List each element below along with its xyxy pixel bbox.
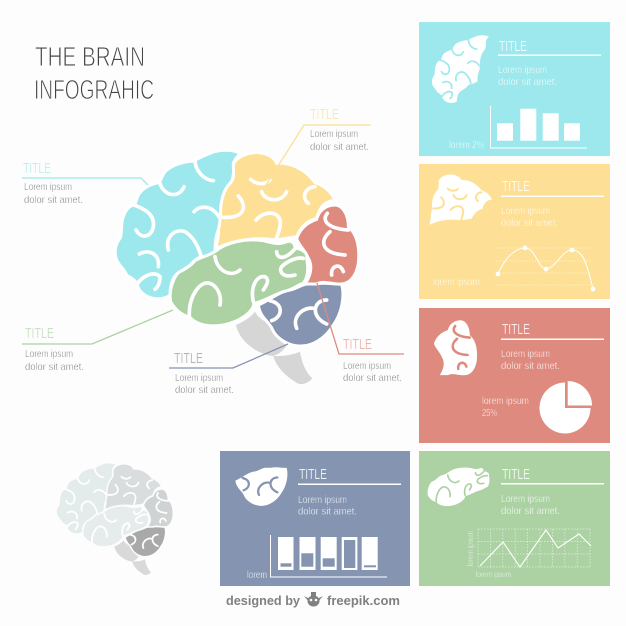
panel: yellow line chart: dolor sit amet. xyxy=(501,217,558,229)
callout: blue lobe xyxy=(169,344,288,396)
grid line chart xyxy=(478,529,591,567)
panel: green grid line chart: lorem ipsum xyxy=(466,531,475,566)
panel: cyan bar chart: Lorem ipsum xyxy=(498,64,547,76)
callout: yellow lobe: TITLE xyxy=(310,106,339,123)
callout: red lobe xyxy=(317,283,404,384)
callout: yellow lobe: Lorem ipsum xyxy=(310,128,358,140)
callout: blue lobe: Lorem ipsum xyxy=(175,372,223,384)
panel: red pie chart: TITLE xyxy=(502,321,530,338)
callout: green lobe xyxy=(22,310,173,373)
panel: red pie chart: dolor sit amet. xyxy=(501,360,560,372)
panel: blue bars xyxy=(220,451,410,586)
pie chart xyxy=(540,381,592,434)
panel: yellow line chart: TITLE xyxy=(502,178,530,195)
title: THE BRAIN xyxy=(35,41,145,72)
callout: green lobe: TITLE xyxy=(25,325,54,342)
callout: yellow lobe xyxy=(266,106,371,185)
callout: blue lobe: dolor sit amet. xyxy=(175,384,234,396)
callout: green lobe: Lorem ipsum xyxy=(25,348,73,360)
panel: red pie chart: 25% xyxy=(482,407,497,419)
panel: blue bars: TITLE xyxy=(299,466,327,483)
callout: red lobe: Lorem ipsum xyxy=(343,360,391,372)
title xyxy=(34,41,154,105)
callout: cyan lobe: dolor sit amet. xyxy=(24,194,83,206)
panel: green grid line chart: Lorem ipsum xyxy=(501,493,550,505)
icon: freepik logo xyxy=(304,592,323,606)
panel: yellow line chart xyxy=(419,164,610,299)
bar gauges xyxy=(270,535,387,577)
footer credit xyxy=(226,592,400,608)
panel: green grid line chart: lorem ipsum xyxy=(476,570,511,579)
callout: yellow lobe: dolor sit amet. xyxy=(310,141,369,153)
panel: green grid line chart xyxy=(419,451,610,586)
panel: cyan bar chart xyxy=(419,22,610,156)
panel: blue bars: dolor sit amet. xyxy=(298,506,357,518)
callout: cyan lobe: TITLE xyxy=(23,160,51,177)
panel: green grid line chart: dolor sit amet. xyxy=(501,505,560,517)
panel: red pie chart xyxy=(419,308,610,443)
bar chart xyxy=(490,106,587,148)
main brain illustration xyxy=(115,150,359,384)
title: INFOGRAHIC xyxy=(34,74,154,105)
panel: cyan bar chart: TITLE xyxy=(499,38,527,55)
callout: blue lobe: TITLE xyxy=(174,350,203,367)
callout: green lobe: dolor sit amet. xyxy=(25,361,84,373)
callout: red lobe: TITLE xyxy=(343,336,372,353)
panel: blue bars: Lorem ipsum xyxy=(298,494,347,506)
panel: red pie chart: Lorem ipsum xyxy=(501,348,550,360)
panel: cyan bar chart: lorem 2% xyxy=(449,140,484,151)
footer credit: freepik.com xyxy=(327,593,400,608)
callout: cyan lobe xyxy=(22,160,148,206)
panel: red pie chart: lorem ipsum xyxy=(482,395,529,407)
panel: yellow line chart: Lorem ipsum xyxy=(501,205,550,217)
footer credit: designed by xyxy=(226,593,301,608)
grey brain xyxy=(56,463,173,575)
panel: cyan bar chart: dolor sit amet. xyxy=(498,76,557,88)
panel: green grid line chart: TITLE xyxy=(502,466,530,483)
callout: cyan lobe: Lorem ipsum xyxy=(24,181,72,193)
callout: red lobe: dolor sit amet. xyxy=(343,372,402,384)
panel: blue bars: lorem xyxy=(247,570,267,581)
panel: yellow line chart: lorem ipsum xyxy=(433,277,480,288)
line chart xyxy=(496,246,595,291)
